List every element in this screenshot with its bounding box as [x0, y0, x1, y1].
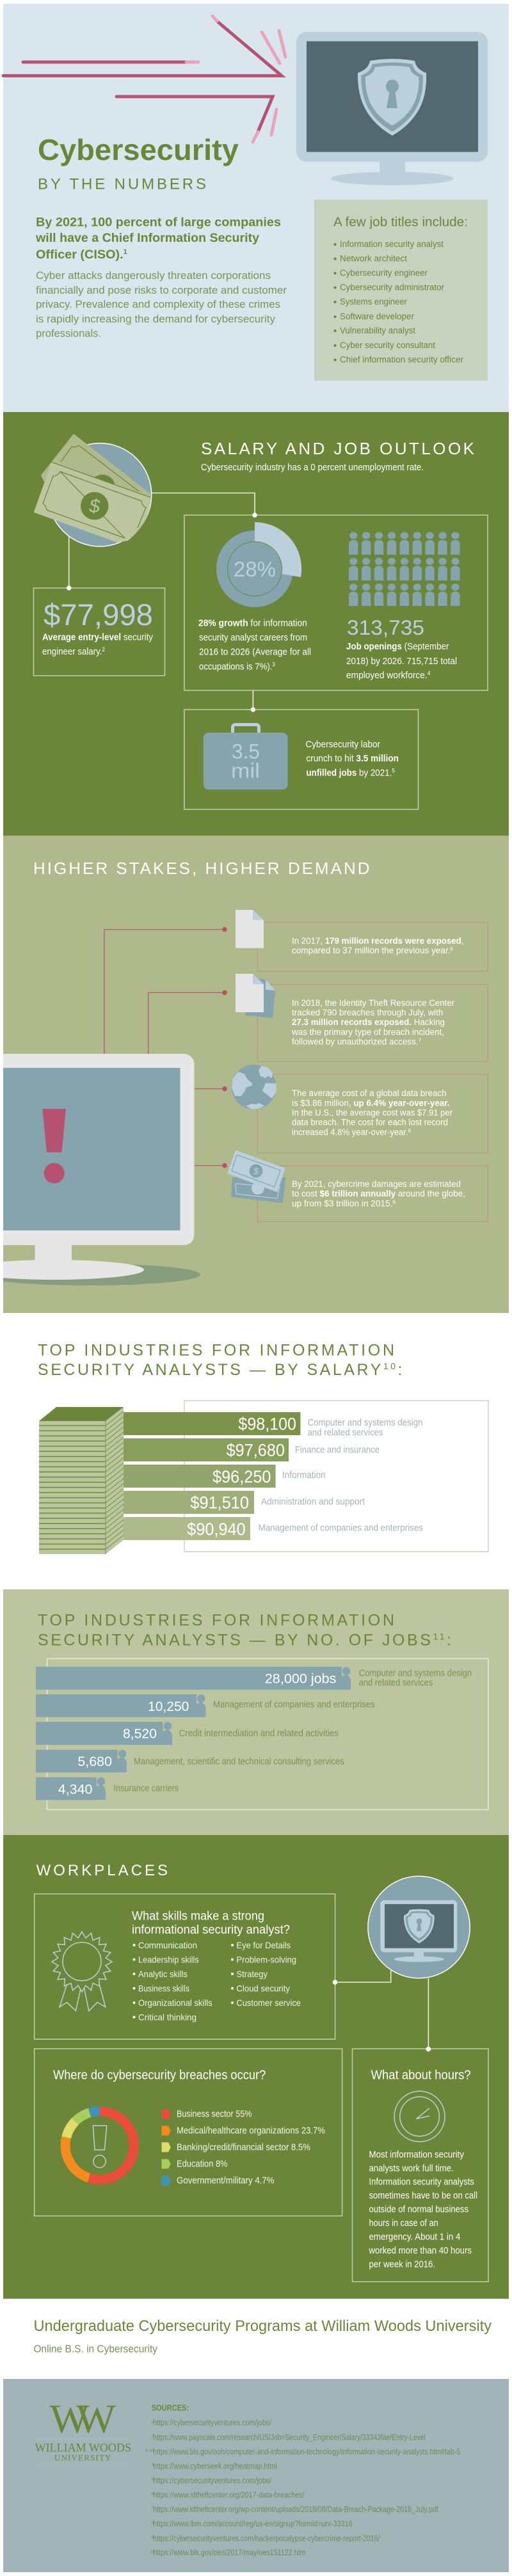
icon: monitor with shield	[296, 32, 488, 186]
stat: 313,735 job openings: Job openings (September	[346, 642, 449, 652]
text block: sources: 7	[152, 2507, 154, 2511]
text block: CISO statement: By 2021, 100 percent of large companies	[36, 216, 281, 229]
bar chart: jobs: 10,250	[148, 1699, 189, 1714]
list: skills	[133, 1940, 301, 2022]
legend: breach sectors: Government/military 4.7%	[177, 2175, 275, 2186]
panel: job titles: Software developer	[340, 312, 414, 321]
text block: cost of a data breach: increased 4.8% year-over-year.	[292, 1127, 412, 1137]
icon: documents	[236, 974, 275, 1018]
text block: cybercrime damages: By 2021, cybercrime damages are estimated	[292, 1179, 461, 1189]
panel: breaches	[35, 2049, 342, 2216]
text block: 27.3 million records: followed by unauthorized access.	[292, 1037, 419, 1047]
chart: people pictogram	[349, 532, 460, 606]
icon: clock	[394, 2091, 445, 2142]
text block: sources: https://www.idtheftcenter.org/2017-data-breaches/	[153, 2490, 305, 2499]
icon: money bills: $	[253, 1166, 259, 1176]
bar chart: jobs: Insurance carriers	[114, 1783, 179, 1794]
text block: labor crunch: unfilled jobs by 2021.	[306, 768, 395, 778]
panel: job titles: Systems engineer	[340, 297, 407, 306]
chart: 28 percent donut: 28%	[234, 557, 276, 581]
panel: job titles: Chief information security officer	[340, 354, 463, 365]
panel: job titles: Cyber security consultant	[340, 340, 435, 350]
stat: 313,735 job openings: 2018) by 2026. 715,715 total	[346, 656, 457, 667]
chart: 28 percent donut	[216, 522, 301, 607]
bar chart: salaries: $90,940	[187, 1520, 246, 1539]
bar chart: jobs: and related services	[359, 1678, 433, 1689]
icon: globe	[232, 1065, 276, 1109]
panel: higher stakes higher demand	[0, 836, 509, 1313]
text block: hours: worked more than 40 hours	[369, 2246, 472, 2256]
text block: 28 percent growth: security analyst careers from	[199, 633, 307, 643]
list: skills: Communication	[138, 1940, 197, 1950]
text block: sources: 4	[152, 2463, 154, 2467]
icon: briefcase: 3.5	[232, 740, 260, 763]
text block: CISO statement: Officer (CISO).	[36, 248, 120, 262]
bar chart: salaries: Information	[282, 1470, 326, 1481]
chart: breach donut	[65, 2111, 134, 2179]
text block: intro paragraph: Cyber attacks dangerously threaten corporations	[36, 269, 271, 282]
text block: cybercrime damages: up from $3 trillion in 2015.	[292, 1199, 391, 1208]
heading: :	[447, 1631, 451, 1649]
connector lines	[69, 493, 255, 710]
bar chart: jobs	[36, 1667, 472, 1800]
heading: SECURITY ANALYSTS — BY NO. OF JOBS	[38, 1631, 431, 1649]
text block: 179 million records: In 2017, 179 million records were exposed,	[292, 936, 463, 946]
frame	[47, 1658, 488, 1809]
legend: breach sectors: Banking/credit/financial sector 8.5%	[177, 2142, 310, 2152]
text block: 179 million records: 6	[451, 946, 454, 952]
text block: hours: hours in case of an	[369, 2218, 438, 2229]
list: skills: Cloud security	[236, 1983, 290, 1993]
text block: sources: SOURCES:	[152, 2403, 189, 2413]
text block: 28 percent growth: occupations is 7%).	[199, 662, 280, 672]
panel: labor crunch	[184, 707, 419, 809]
text block: sources: https://www.bls.gov/ooh/computer-and-information-technology/information-security-analysts.htm#tab-5	[153, 2447, 460, 2456]
title	[38, 133, 239, 193]
text block: 27.3 million records: was the primary type of breach incident,	[291, 1028, 444, 1037]
bar chart: jobs: Management of companies and enterprises	[213, 1699, 375, 1710]
text block: sources: 6	[152, 2493, 154, 2497]
legend: breach sectors: Medical/healthcare organizations 23.7%	[177, 2126, 325, 2136]
text block: sources: 1	[152, 2421, 154, 2424]
icon: money bills	[227, 1150, 286, 1203]
heading: HIGHER STAKES, HIGHER DEMAND	[33, 859, 370, 878]
text block: 28 percent growth: 2016 to 2026 (Average for all	[199, 648, 311, 658]
panel: workplaces	[3, 1835, 509, 2299]
frame	[184, 1401, 488, 1552]
logo: William Woods University	[35, 2396, 131, 2465]
bar chart: salaries: and related services	[308, 1427, 383, 1438]
bar chart: jobs: Computer and systems design	[359, 1667, 472, 1678]
text block: sources: https://www.cyberseek.org/heatmap.html	[153, 2461, 277, 2470]
stat: entry level salary: Average entry-level security	[42, 633, 154, 643]
bar chart: jobs: Credit intermediation and related activities	[179, 1728, 339, 1738]
list: skills: Business skills	[138, 1983, 189, 1993]
text block: 28 percent growth: 3	[272, 662, 275, 668]
heading	[201, 439, 475, 473]
text block: 27.3 million records: 7	[419, 1038, 422, 1043]
panel: top industries by jobs	[3, 1589, 509, 1835]
panel: job titles: Network architect	[340, 253, 407, 264]
bar chart: salaries	[124, 1412, 423, 1540]
list: skills: Strategy	[236, 1969, 268, 1979]
legend: breach sectors	[161, 2109, 325, 2186]
bar chart: jobs: Management, scientific and technical consulting services	[134, 1756, 344, 1767]
bar chart: salaries: $97,680	[227, 1441, 285, 1460]
text block: 28 percent growth: 28% growth for information	[198, 618, 307, 628]
panel: university programs: Online B.S. in Cybersecurity	[33, 2343, 157, 2355]
text block: cybercrime damages	[292, 1179, 465, 1208]
bar chart: salaries: Management of companies and enterprises	[259, 1523, 423, 1534]
text block: intro paragraph: financially and pose risks to corporate and customer	[36, 284, 287, 296]
text block: hours: per week in 2016.	[369, 2260, 435, 2270]
icon: stack of money	[39, 1407, 124, 1554]
heading: 11	[433, 1631, 445, 1641]
stat: entry level salary: $77,998	[44, 598, 153, 632]
text block: sources: https://cybersecurityventures.com/jobs/	[153, 2476, 271, 2485]
heading: 10	[383, 1361, 396, 1371]
stat: entry level salary	[33, 585, 165, 676]
bar chart: salaries: Finance and insurance	[295, 1445, 380, 1456]
icon: money in circle: $	[88, 496, 100, 517]
icon: briefcase	[204, 724, 288, 790]
text block: cybercrime damages: to cost $6 trillion annually around the globe,	[292, 1189, 465, 1198]
heading: :	[398, 1361, 402, 1379]
panel: breaches: Where do cybersecurity breaches occur?	[53, 2068, 266, 2082]
text block: 27.3 million records: In 2018, the Identity Theft Resource Center	[292, 998, 454, 1008]
text block: sources: https://www.ibm.com/account/reg/us-en/signup?formid=urx-33316	[153, 2520, 353, 2529]
panel: footer sources	[3, 2379, 509, 2572]
bar chart: jobs: 5,680	[77, 1754, 112, 1769]
bar chart: jobs: 8,520	[123, 1726, 157, 1742]
text block: sources	[145, 2403, 460, 2557]
list: skills: Organizational skills	[138, 1998, 212, 2008]
panel: university programs	[33, 2318, 492, 2355]
text block: 27.3 million records: 27.3 million records exposed. Hacking	[292, 1017, 445, 1027]
panel: university programs: Undergraduate Cybersecurity Programs at William Woods University	[33, 2318, 492, 2335]
legend: breach sectors: Education 8%	[177, 2159, 228, 2169]
text block: skills heading: informational security analyst?	[132, 1923, 290, 1937]
panel: job titles: Cybersecurity administrator	[340, 283, 444, 292]
heading: Cybersecurity industry has a 0 percent unemployment rate.	[201, 462, 424, 473]
panel: hours	[352, 2047, 488, 2282]
list: skills: Analytic skills	[138, 1969, 188, 1979]
text block: hours: sometimes have to be on call	[369, 2191, 477, 2201]
text block: sources: https://cybersecurityventures.com/jobs/	[153, 2419, 271, 2428]
callout boxes outlines	[257, 923, 488, 1222]
panel: hours: What about hours?	[371, 2068, 471, 2082]
heading: TOP INDUSTRIES FOR INFORMATION	[38, 1612, 394, 1630]
list: skills: Customer service	[236, 1998, 301, 2008]
text block: sources: https://www.idtheftcenter.org/wp-content/uploads/2018/08/Data-Breach-Package-2018_July.pdf	[153, 2505, 438, 2514]
text block: 28 percent growth	[198, 618, 311, 672]
logo: William Woods University: W	[50, 2396, 90, 2442]
logo: William Woods University: W	[76, 2396, 116, 2442]
panel: job titles: A few job titles include:	[333, 215, 468, 229]
stat: 313,735 job openings: 313,735	[347, 616, 424, 639]
text block: hours	[369, 2150, 477, 2270]
legend: breach sectors: Business sector 55%	[177, 2109, 252, 2119]
icon: document	[236, 910, 264, 948]
text block: skills heading: What skills make a strong	[132, 1910, 264, 1923]
heading	[38, 1342, 402, 1379]
text block: hours: Most information security	[369, 2150, 465, 2160]
icon: alert monitor	[0, 1054, 200, 1285]
panel: job titles	[314, 200, 488, 381]
connector lines	[335, 1971, 428, 2049]
panel: top industries by salary	[38, 1342, 488, 1554]
text block: sources: https://www.payscale.com/research/US/Job=Security_Engineer/Salary/33343fae/Entry-Level	[153, 2433, 426, 2442]
stat: 313,735 job openings: employed workforce.	[346, 671, 432, 681]
stat: entry level salary: 2	[102, 646, 105, 653]
bar chart: salaries: Computer and systems design	[308, 1417, 423, 1428]
icon: briefcase: mil	[231, 759, 260, 783]
text block: CISO statement: will have a Chief Information Security	[35, 232, 259, 245]
text block: cost of a data breach: data breach. The cost for each lost record	[292, 1117, 448, 1127]
text block: cost of a data breach: is $3.86 million, up 6.4% year-over-year.	[292, 1098, 449, 1108]
text block: sources: 2	[152, 2435, 154, 2439]
stat: entry level salary: engineer salary.	[42, 647, 108, 657]
text block: intro paragraph: professionals.	[36, 328, 101, 339]
panel: growth and job openings	[184, 513, 488, 690]
list: skills: Leadership skills	[138, 1954, 199, 1964]
text block: labor crunch: Cybersecurity labor	[306, 740, 380, 750]
text block: 27.3 million records: tracked 790 breaches through July, with	[292, 1008, 443, 1017]
text block: CISO statement: 1	[124, 248, 127, 256]
text block: cost of a data breach: In the U.S., the average cost was $7.91 per	[292, 1108, 452, 1118]
text block: hours: Information security analysts	[369, 2177, 474, 2188]
bar chart: salaries: Administration and support	[261, 1496, 365, 1507]
icon: money in circle	[34, 434, 152, 546]
heading: TOP INDUSTRIES FOR INFORMATION	[38, 1342, 394, 1360]
text block: labor crunch	[306, 740, 399, 778]
text block: sources: https://cybersecurityventures.com/hackerpocalypse-cybercrime-report-2016/	[153, 2534, 380, 2543]
text block: 179 million records: compared to 37 million the previous year.	[292, 946, 449, 955]
text block: intro paragraph: is rapidly increasing the demand for cybersecurity	[36, 313, 275, 325]
text block: hours: outside of normal business	[369, 2205, 468, 2215]
bar chart: salaries: $96,250	[212, 1467, 271, 1486]
title: BY THE NUMBERS	[38, 175, 206, 193]
heading	[38, 1612, 451, 1649]
text block: 179 million records	[292, 936, 463, 955]
bar chart: jobs: 28,000 jobs	[265, 1671, 337, 1687]
text block: sources: 9	[152, 2536, 154, 2540]
bar chart: jobs: 4,340	[58, 1781, 92, 1797]
heading: SALARY AND JOB OUTLOOK	[201, 439, 475, 458]
panel: salary and job outlook	[3, 412, 509, 836]
panel: job titles: Information security analyst	[340, 239, 444, 249]
text block: labor crunch: 5	[392, 768, 395, 774]
bar chart: salaries: $91,510	[190, 1493, 249, 1513]
title: Cybersecurity	[38, 133, 239, 166]
list: skills: Critical thinking	[138, 2012, 196, 2022]
text block: sources: https://www.bls.gov/oes/2017/may/oes151122.htm	[153, 2548, 306, 2557]
icon: monitor in circle	[368, 1876, 470, 1978]
text block: skills heading	[132, 1910, 290, 1937]
text block: sources: 8	[152, 2522, 154, 2525]
logo: William Woods University: WILLIAM WOODS	[35, 2442, 131, 2455]
text block: hours: analysts work full time.	[369, 2163, 454, 2174]
text block: cybercrime damages: 9	[392, 1199, 396, 1205]
connector lines	[104, 927, 227, 1168]
text block: sources: 3+10	[145, 2449, 154, 2453]
stat: 313,735 job openings: 4	[428, 670, 430, 676]
bar chart: salaries: $98,100	[238, 1415, 296, 1434]
text block: hours: emergency. About 1 in 4	[369, 2232, 460, 2243]
list: skills: Problem-solving	[236, 1954, 296, 1964]
text block: intro paragraph: privacy. Prevalence and complexity of these crimes	[36, 298, 280, 310]
icon: award ribbon	[52, 1932, 112, 2011]
icon: converging attack arrows	[3, 16, 285, 142]
logo: William Woods University: UNIVERSITY	[54, 2453, 111, 2463]
text block: cost of a data breach: 8	[408, 1128, 412, 1134]
text block: cost of a data breach	[292, 1088, 452, 1137]
text block: sources: 5	[152, 2478, 154, 2482]
stat: 313,735 job openings	[346, 616, 457, 681]
text block: sources: 11	[150, 2550, 154, 2554]
list: skills: Eye for Details	[236, 1940, 291, 1950]
text block: cost of a data breach: The average cost of a global data breach	[292, 1088, 447, 1098]
panel: skills	[35, 1894, 337, 2039]
heading: WORKPLACES	[36, 1862, 168, 1879]
panel: job titles: Vulnerability analyst	[340, 326, 415, 335]
heading: SECURITY ANALYSTS — BY SALARY	[38, 1361, 381, 1379]
text block: CISO statement	[35, 216, 281, 262]
text block: 27.3 million records	[291, 998, 454, 1047]
panel: header intro	[3, 4, 509, 413]
text block: labor crunch: crunch to hit 3.5 million	[306, 754, 399, 764]
panel: job titles: Cybersecurity engineer	[340, 268, 428, 278]
text block: intro paragraph	[36, 269, 287, 339]
